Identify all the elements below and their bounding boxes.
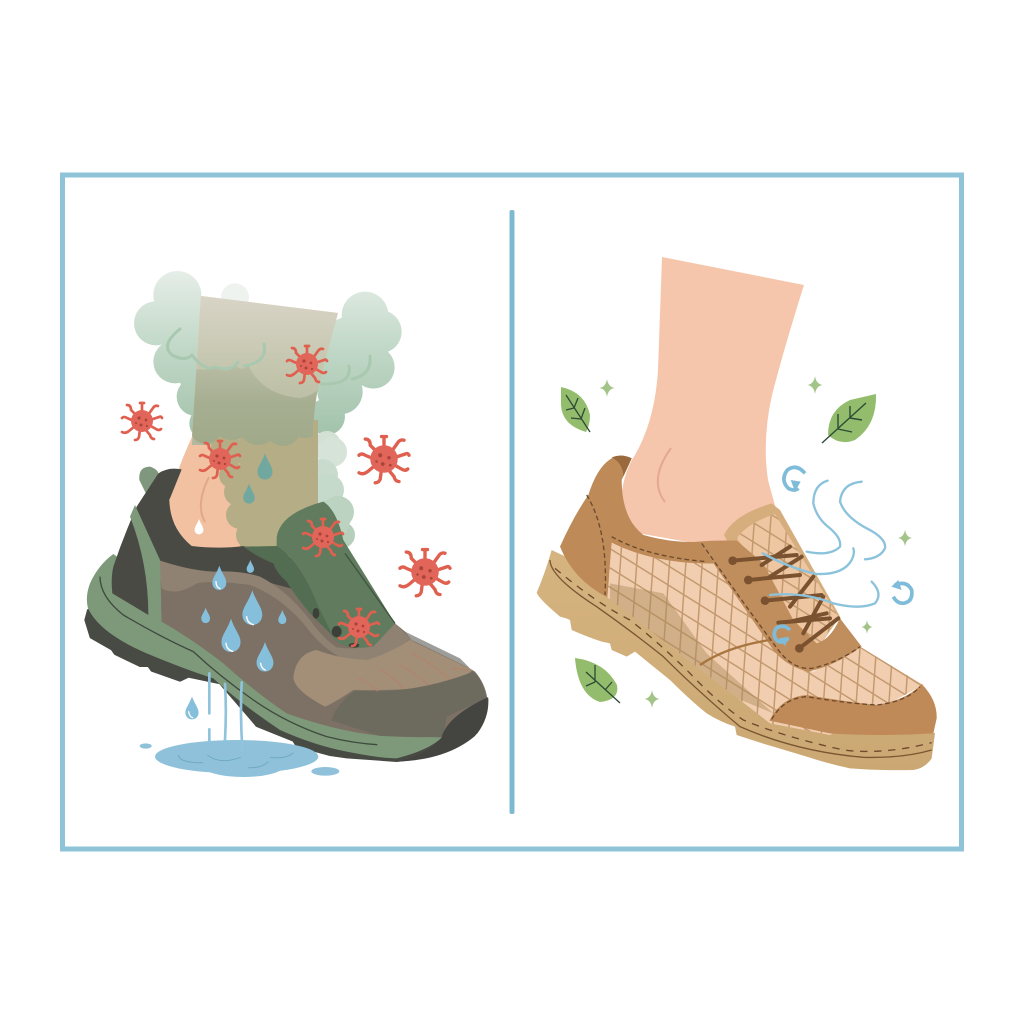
swirl arrows xyxy=(774,467,912,642)
laces xyxy=(733,547,838,648)
puddle ripples xyxy=(178,753,293,768)
toe bumper xyxy=(397,697,488,762)
sweat drops xyxy=(185,560,286,719)
leaf: top left xyxy=(561,387,590,432)
leg with stale overlay xyxy=(168,296,338,556)
leaf: top right xyxy=(822,394,876,443)
collar stitch xyxy=(612,537,707,562)
collar and heel dark xyxy=(112,469,297,622)
tongue mesh xyxy=(737,514,838,644)
toe cap xyxy=(332,672,486,737)
midsole line xyxy=(100,577,377,745)
lace panel xyxy=(698,540,862,672)
lace panel stitch xyxy=(702,543,860,668)
midsole xyxy=(87,554,443,758)
upper base xyxy=(158,553,487,739)
sole line xyxy=(550,560,932,757)
ankle cloud beside the shoe xyxy=(306,431,355,548)
cloud outlines xyxy=(168,329,370,384)
odour cloud behind the leg xyxy=(134,271,402,440)
eyelets xyxy=(313,608,359,648)
toe panel xyxy=(293,640,473,707)
side overlay seam xyxy=(700,640,770,665)
puddle xyxy=(155,740,318,777)
panel: sweaty shoe xyxy=(85,271,488,777)
tongue edge xyxy=(345,553,395,623)
germs xyxy=(122,346,450,646)
foot crease xyxy=(658,448,671,502)
stale upper leg xyxy=(192,296,338,445)
heel inner xyxy=(612,456,632,477)
shoe: mesh shoe xyxy=(537,456,937,770)
leaf: bottom left xyxy=(575,658,620,703)
sparkles xyxy=(600,376,912,708)
swirl arrow heads xyxy=(778,480,902,646)
dripping streams xyxy=(209,673,242,749)
bare foot xyxy=(620,257,804,560)
teal drops on ankle xyxy=(243,453,272,504)
scalloped dark green xyxy=(243,546,333,637)
centre divider xyxy=(510,210,514,814)
sweat drop on foot xyxy=(195,519,203,534)
heel stripe xyxy=(130,505,162,622)
foot crease xyxy=(201,477,209,522)
sole xyxy=(537,550,935,770)
sole stitching xyxy=(555,568,932,751)
puddle splashes xyxy=(140,743,339,776)
mesh panel xyxy=(607,537,927,737)
lace opening brown xyxy=(333,623,410,660)
tongue xyxy=(277,502,395,648)
heel stitch xyxy=(587,495,605,595)
lighter band xyxy=(158,560,417,665)
outer frame xyxy=(62,175,962,849)
panel: breathable shoe xyxy=(537,257,937,770)
toe wrinkles xyxy=(358,653,468,700)
toe highlight xyxy=(405,632,470,668)
eyelets xyxy=(728,556,804,653)
shoe: hiking shoe xyxy=(85,467,488,777)
drop highlights xyxy=(189,582,265,718)
khaki foot haze xyxy=(210,420,318,558)
toe cap xyxy=(769,684,937,735)
tongue xyxy=(724,503,840,650)
air current swirls xyxy=(763,481,885,607)
heel and collar xyxy=(560,456,717,597)
outsole xyxy=(85,610,487,761)
toe stitch xyxy=(772,687,920,719)
heel tab xyxy=(139,467,159,495)
cloud lobes over the leg xyxy=(190,365,323,446)
